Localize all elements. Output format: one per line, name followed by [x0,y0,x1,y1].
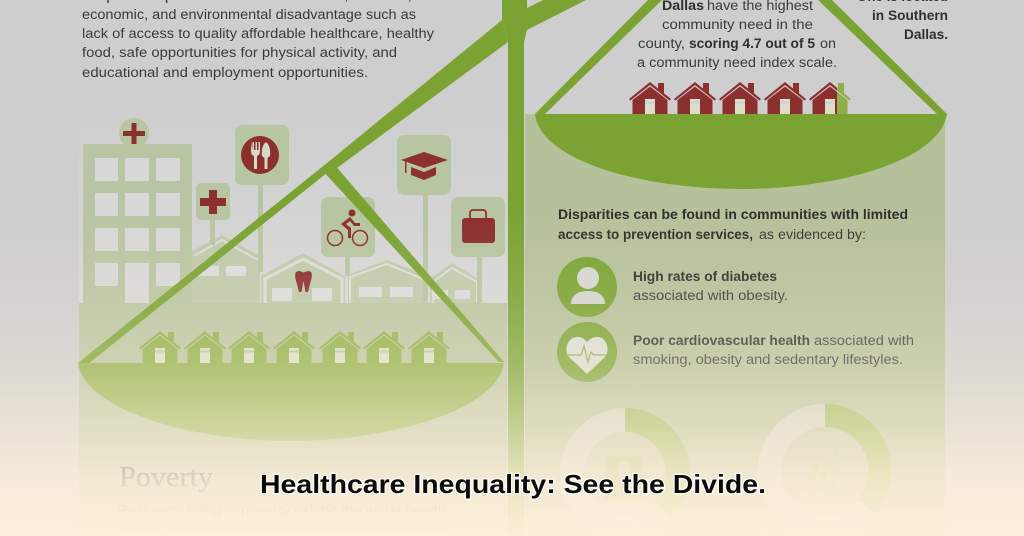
panel: right lower [525,114,945,536]
community need text: community need in the [662,17,813,32]
red houses on right pan [629,82,851,114]
scale: right hanger [535,0,947,114]
poverty text [117,503,451,535]
icon: tooth [295,271,312,292]
icon sign: food [235,125,289,272]
icon: person in circle [557,257,617,317]
southern dallas note: in Southern [872,8,948,23]
poverty text: Residents living in poverty exhibit the worst health [117,503,446,518]
right pan [535,114,947,189]
disparities heading: Disparities can be found in communities with limited [558,207,908,222]
panel: left lower [79,303,507,536]
community need text: county, [638,36,685,51]
poverty heading: Poverty [119,462,213,493]
left pan [78,363,504,441]
southern dallas note: Dallas. [904,27,948,42]
cardiovascular text [633,333,914,367]
illustration: hospital building [83,118,192,303]
scale: beam and left hanger [78,20,508,364]
community need text: scoring 4.7 out of 5 [689,36,815,51]
cardiovascular text: smoking, obesity and sedentary lifestyles. [633,352,903,367]
diabetes text: associated with obesity. [633,288,788,303]
title: Healthcare Inequality: See the Divide. [260,469,766,499]
diabetes text [633,269,788,303]
green houses on left pan [139,331,450,363]
community need text: on [820,36,836,51]
illustration: background houses [192,235,478,303]
icon: heart in circle [557,322,617,382]
icon: left donut glyph [605,456,642,500]
intro text block: economic, and environmental disadvantage such as [82,7,416,22]
poverty text: status. The following four factors are measured in a [117,520,451,535]
intro text block: lack of access to quality affordable healthcare, healthy [82,26,434,41]
intro text block: educational and employment opportunities. [82,65,368,80]
icon: grapes [806,450,852,494]
community need text [637,0,837,70]
disparities heading: access to prevention services, [558,227,753,242]
icon sign: graduation cap [397,135,451,303]
donut chart: right [770,416,880,526]
intro text block [82,0,434,80]
southern dallas note [857,0,948,42]
scale: centre post [502,0,527,536]
community need text: a community need index scale. [637,55,837,70]
icon sign: cycling [321,197,375,276]
cardiovascular text: associated with [814,333,914,348]
icon sign: briefcase [451,197,505,303]
scale: left hanger right leg [322,163,504,362]
scale: beam right of post [525,0,586,31]
cardiovascular text: Poor cardiovascular health [633,333,810,348]
disparities heading [558,207,908,242]
icon sign: small cross [196,183,230,245]
diabetes text: High rates of diabetes [633,269,777,284]
panel: left upper light area [79,100,507,303]
donut chart: left [572,420,678,526]
intro text block: food, safe opportunities for physical activity, and [82,45,397,60]
disparities heading: as evidenced by: [759,227,866,242]
